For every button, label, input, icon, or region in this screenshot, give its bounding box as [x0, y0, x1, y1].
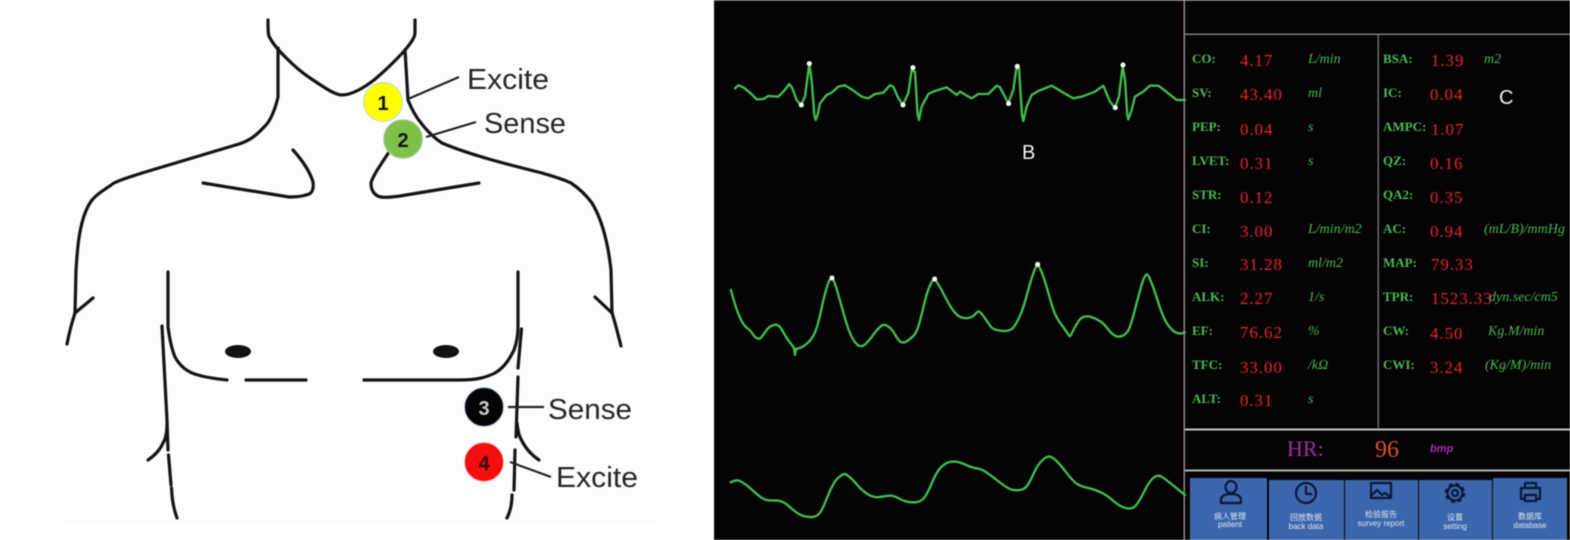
row ALT: ALT:: [1192, 391, 1221, 406]
button: patient: [1190, 478, 1267, 540]
row TPR: [1383, 289, 1558, 308]
row LVET: 0.31: [1240, 154, 1273, 173]
row ALT: [1192, 391, 1314, 410]
electrode 2: sense: Sense: [484, 108, 566, 140]
electrode 3: sense: Sense: [548, 394, 632, 426]
electrode 3: sense: [464, 388, 632, 426]
row SI: [1192, 255, 1343, 274]
row ALK: [1192, 289, 1325, 308]
button: back data: [1269, 480, 1344, 540]
button: survey report: 检验报告: [1365, 509, 1397, 519]
right nipple: [433, 345, 459, 358]
electrode 1: excite: Excite: [467, 64, 549, 96]
button: setting: setting: [1443, 522, 1467, 531]
button: database: 数据库: [1518, 511, 1542, 521]
row SI: ml/m2: [1308, 256, 1343, 271]
electrode 4: excite: [464, 442, 638, 494]
row SV: SV:: [1192, 85, 1212, 100]
row CI: 3.00: [1240, 222, 1273, 241]
button: patient: 病人管理: [1214, 511, 1246, 521]
row CW: Kg.M/min: [1487, 324, 1544, 339]
row AMPC: AMPC:: [1383, 119, 1426, 134]
row CWI: (Kg/M)/min: [1485, 358, 1551, 373]
row ALK: ALK:: [1192, 289, 1224, 304]
row CWI: [1383, 357, 1551, 377]
panel A: torso electrode placement diagram: [64, 18, 638, 520]
electrode 1: excite: [364, 64, 549, 122]
row MAP: MAP:: [1383, 255, 1417, 270]
row ALK: 2.27: [1240, 289, 1273, 308]
icon: person: [1221, 481, 1241, 503]
row CI: L/min/m2: [1307, 222, 1362, 237]
electrode 1: excite: 1: [377, 93, 389, 115]
row CO: 4.17: [1240, 51, 1273, 70]
heart rate readout: [1287, 436, 1454, 463]
row STR: STR:: [1192, 187, 1222, 202]
row CWI: 3.24: [1430, 358, 1463, 377]
waveform 2: impedance trace: [731, 262, 1185, 355]
row LVET: LVET:: [1192, 153, 1230, 168]
row ALK: 1/s: [1308, 290, 1325, 305]
row BSA: m2: [1484, 52, 1501, 67]
row TFC: /kΩ: [1307, 358, 1328, 373]
row SI: SI:: [1192, 255, 1209, 270]
row IC: IC:: [1383, 85, 1402, 100]
row CW: 4.50: [1430, 324, 1463, 343]
row PEP: 0.04: [1240, 120, 1273, 139]
row STR: 0.12: [1240, 188, 1273, 207]
row EF: 76.62: [1240, 323, 1283, 342]
row PEP: PEP:: [1192, 119, 1221, 134]
row CWI: CWI:: [1383, 357, 1415, 372]
row BSA: 1.39: [1431, 51, 1464, 70]
button: back data: 回放数据: [1290, 512, 1322, 522]
row IC: [1383, 85, 1463, 104]
row BSA: BSA:: [1383, 51, 1413, 66]
electrode 2: sense: [384, 108, 566, 158]
row CO: [1192, 51, 1341, 70]
button: setting: [1419, 480, 1492, 540]
panel letter C: C: [1499, 87, 1513, 109]
row PEP: [1192, 119, 1314, 139]
row AMPC: 1.07: [1431, 120, 1464, 139]
row SV: 43.40: [1240, 85, 1283, 104]
button: survey report: [1345, 480, 1418, 540]
row TPR: 1523.33: [1431, 289, 1493, 308]
row QA2: [1383, 187, 1463, 207]
row QZ: QZ:: [1383, 153, 1406, 168]
parameter column: right: [1383, 51, 1565, 377]
row ALT: 0.31: [1240, 391, 1273, 410]
electrode 3: sense: 3: [478, 398, 490, 420]
row EF: EF:: [1192, 323, 1213, 338]
heart rate readout: 96: [1375, 437, 1399, 463]
row CI: [1192, 221, 1362, 241]
row EF: %: [1308, 324, 1320, 339]
icon: clock: [1296, 483, 1316, 503]
row TFC: [1192, 357, 1328, 377]
row ALT: s: [1308, 392, 1314, 407]
row EF: [1192, 323, 1320, 342]
row QA2: 0.35: [1430, 188, 1463, 207]
panel letter B: B: [1022, 142, 1035, 164]
heart rate readout: HR:: [1287, 436, 1324, 461]
torso outline: [67, 20, 621, 518]
row AMPC: [1383, 119, 1464, 139]
row AC: 0.94: [1430, 222, 1463, 241]
icon: printer: [1521, 483, 1540, 501]
row AC: [1383, 221, 1565, 241]
row MAP: 79.33: [1431, 255, 1474, 274]
waveform 1: ECG trace: [735, 61, 1185, 121]
row TPR: dyn.sec/cm5: [1489, 290, 1558, 305]
row CI: CI:: [1192, 221, 1211, 236]
row PEP: s: [1308, 120, 1314, 135]
heart rate readout: bmp: [1430, 443, 1454, 455]
button: database: database: [1514, 521, 1547, 530]
row LVET: [1192, 153, 1314, 173]
button: setting: 设置: [1447, 512, 1463, 522]
electrode 4: excite: 4: [478, 453, 490, 475]
left nipple: [225, 345, 251, 358]
row AC: AC:: [1383, 221, 1406, 236]
electrode 2: sense: 2: [397, 130, 409, 152]
row LVET: s: [1308, 154, 1314, 169]
panel B and C: monitor screen: [713, 0, 1570, 540]
row TFC: TFC:: [1192, 357, 1222, 372]
button: back data: back data: [1289, 522, 1324, 531]
icon: gear: [1446, 484, 1464, 502]
row CW: [1383, 323, 1544, 343]
row QZ: [1383, 153, 1463, 173]
row QZ: 0.16: [1430, 154, 1463, 173]
electrode 4: excite: Excite: [556, 462, 638, 494]
row BSA: [1383, 51, 1501, 70]
row SV: ml: [1308, 86, 1322, 101]
row MAP: [1383, 255, 1474, 274]
parameter column: left: [1192, 51, 1362, 410]
row CO: CO:: [1192, 51, 1216, 66]
button: patient: patient: [1218, 520, 1243, 529]
row TFC: 33.00: [1240, 358, 1283, 377]
row TPR: TPR:: [1383, 289, 1413, 304]
row SV: [1192, 85, 1322, 104]
icon: picture: [1371, 483, 1391, 498]
row STR: [1192, 187, 1273, 207]
row SI: 31.28: [1240, 255, 1283, 274]
waveform 3: lower trace: [731, 457, 1185, 517]
row QA2: QA2:: [1383, 187, 1413, 202]
row CO: L/min: [1307, 52, 1341, 67]
row AC: (mL/B)/mmHg: [1484, 222, 1565, 237]
row IC: 0.04: [1430, 85, 1463, 104]
button: survey report: survey report: [1358, 519, 1405, 528]
row CW: CW:: [1383, 323, 1409, 338]
button: database: [1493, 478, 1567, 540]
